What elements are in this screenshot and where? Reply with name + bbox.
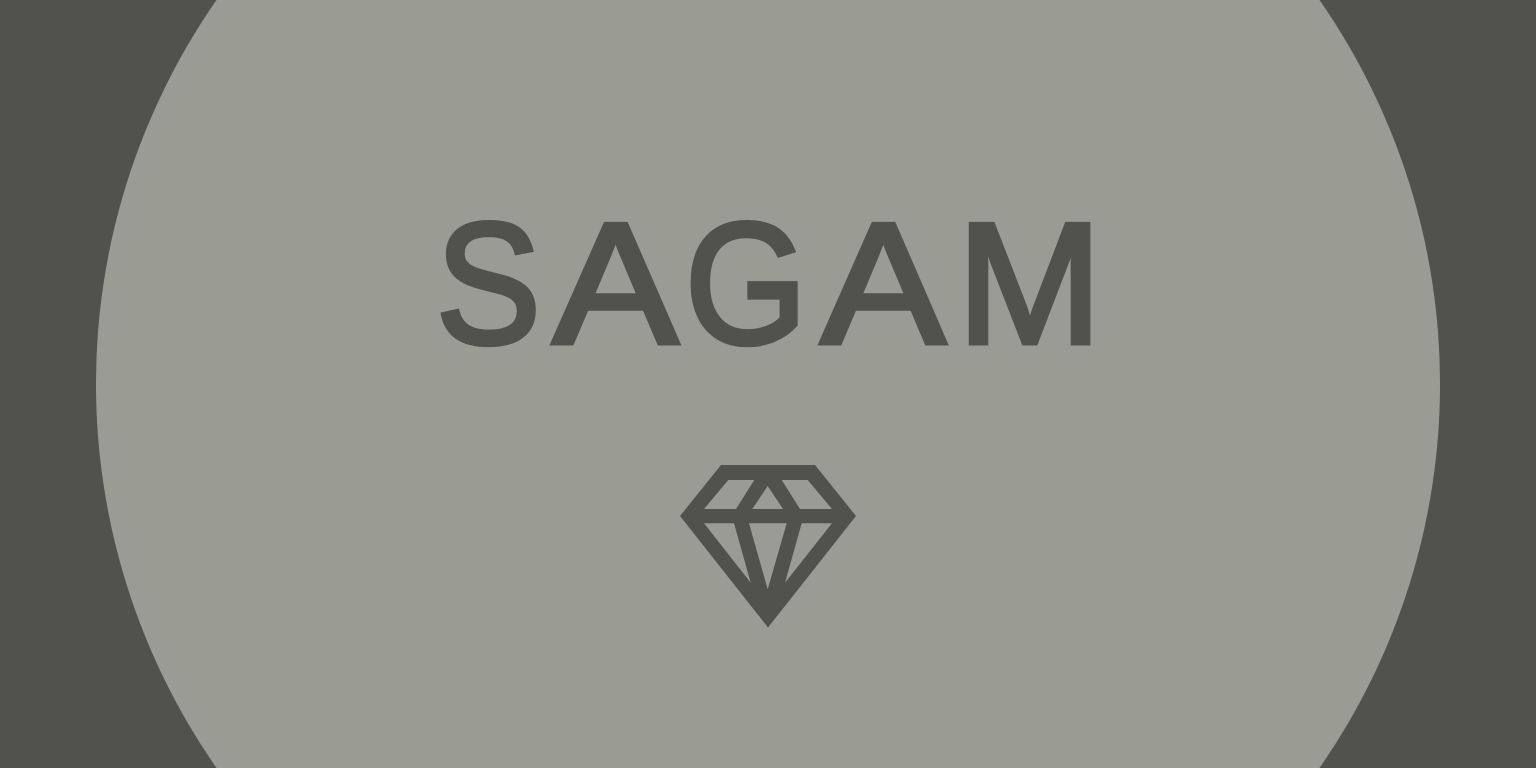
icon: diamond: [680, 465, 856, 628]
title: G: [685, 187, 808, 380]
title: M: [957, 187, 1103, 380]
title: S: [436, 187, 541, 380]
title: A: [821, 187, 946, 380]
title: A: [553, 187, 678, 380]
